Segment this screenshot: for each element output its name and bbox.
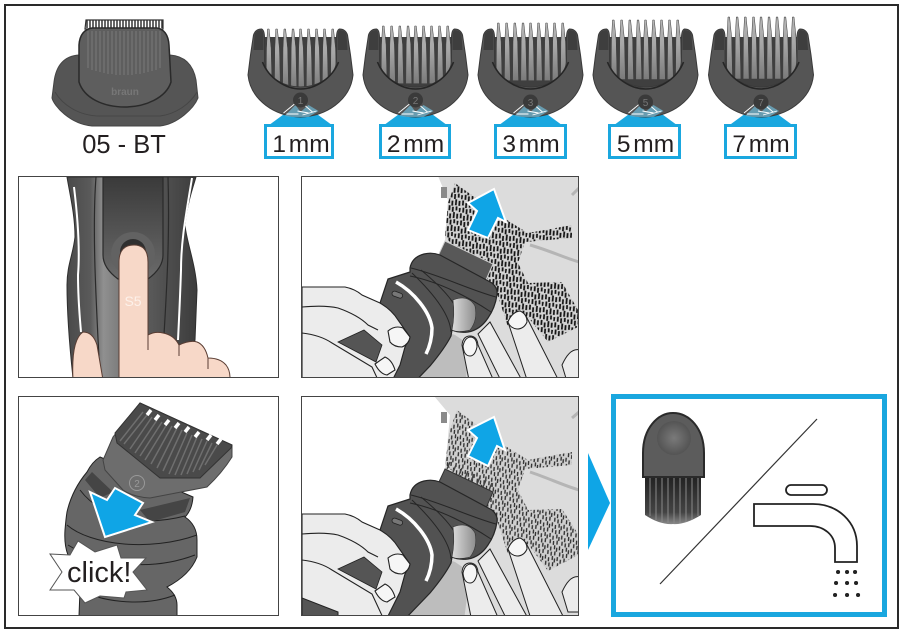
label: 5 mm (610, 126, 680, 158)
label: 7 mm (726, 126, 796, 158)
comb: 2 mm: 2 (413, 96, 419, 107)
comb: 3 mm (478, 23, 583, 124)
comb: 1 mm (248, 29, 353, 124)
comb head (103, 403, 232, 498)
S5 label: S5 (124, 293, 142, 309)
thumb (73, 332, 103, 380)
dark handle (302, 598, 338, 615)
label: 05 - BT: 05 - BT (82, 131, 166, 159)
shaver body (65, 457, 197, 616)
panel: shaving without comb (301, 176, 579, 378)
icon: 05-BT trimmer head: braun (111, 87, 139, 98)
hand and finger (119, 245, 230, 378)
click text: click! (67, 557, 131, 589)
icon: tap with water (754, 485, 858, 595)
label: 1 mm: 1 mm (272, 131, 330, 158)
comb: 7 mm: 7 (758, 98, 764, 109)
panel: shaving with comb (302, 396, 580, 632)
button recess (103, 177, 163, 279)
panel: attach comb: 2 (134, 479, 140, 490)
arrow up (468, 189, 506, 238)
comb: 5 mm (593, 20, 698, 124)
face (434, 396, 580, 616)
panel: attach comb (18, 396, 278, 616)
comb: 1 mm: 1 (298, 96, 304, 107)
arrow: to cleaning (588, 453, 610, 550)
label: 5 mm: 5 mm (617, 131, 674, 158)
arrow up (468, 417, 505, 466)
label: 3 mm (496, 126, 566, 158)
icon: brush (643, 413, 704, 524)
click burst (50, 541, 147, 603)
label: 2 mm: 2 mm (387, 131, 444, 158)
comb number (130, 476, 144, 490)
label: 7 mm: 7 mm (732, 131, 790, 158)
panel: press release button (18, 176, 278, 380)
divider slash (660, 419, 817, 584)
trimmer head (438, 241, 493, 280)
trimmer head with comb (438, 469, 493, 508)
icon: 05-BT trimmer head (52, 20, 198, 126)
arrow down (90, 488, 152, 537)
face (438, 176, 580, 378)
label: 3 mm: 3 mm (502, 131, 560, 158)
comb: 2 mm (363, 26, 468, 124)
comb: 3 mm: 3 (528, 98, 534, 109)
comb: 7 mm (708, 17, 814, 124)
beard (445, 183, 578, 342)
label: 2 mm (380, 126, 450, 158)
shaver body (67, 177, 197, 378)
beard (445, 410, 580, 571)
comb: 5 mm: 5 (643, 98, 649, 109)
panel: cleaning (614, 396, 884, 614)
